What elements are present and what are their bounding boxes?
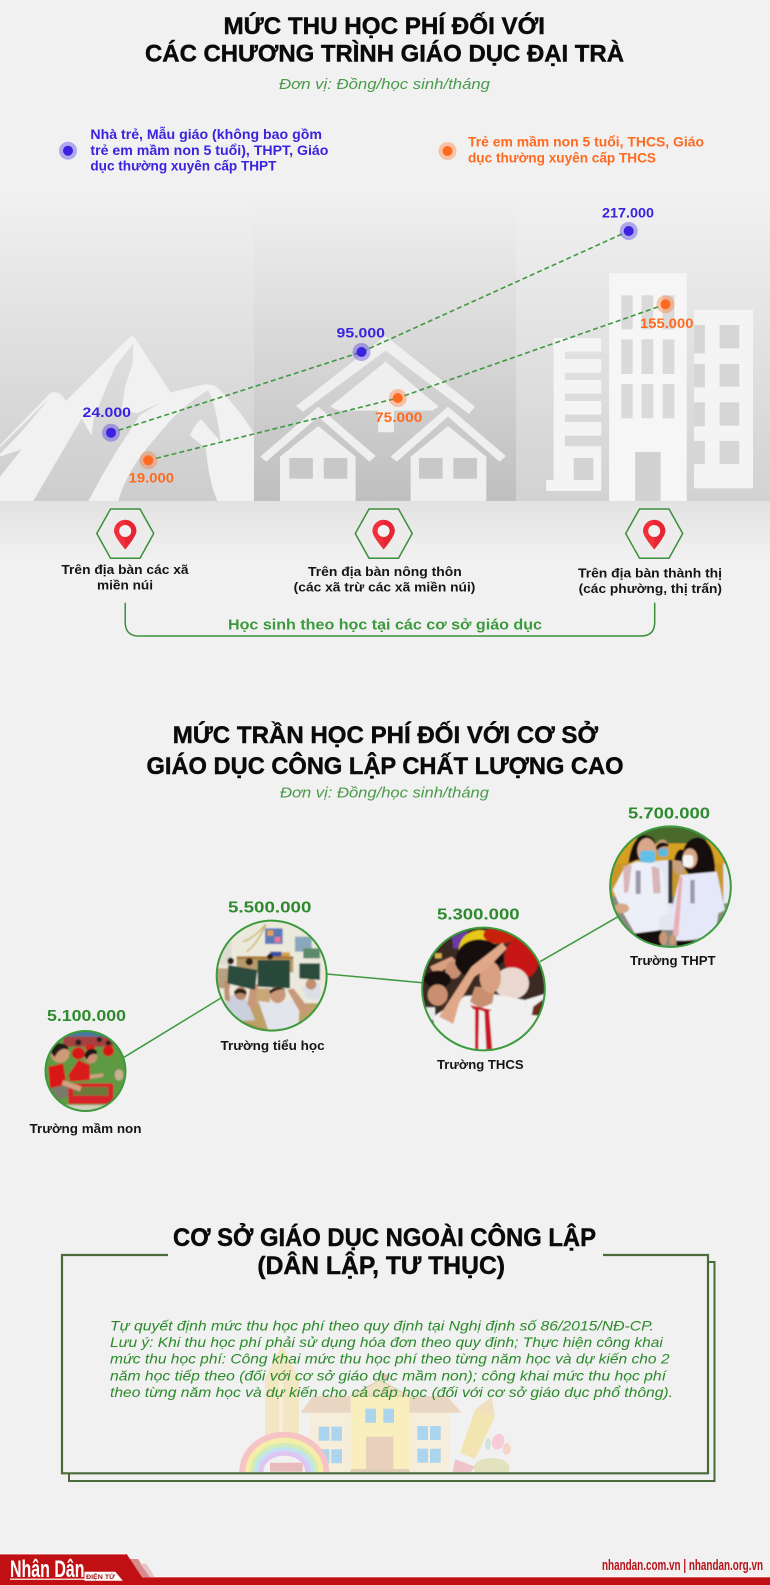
logo: Nhân Dân bbox=[0, 1553, 155, 1585]
line: orange series bbox=[148, 304, 666, 460]
value labels: 75.000 bbox=[375, 409, 423, 425]
location: mountain communes bbox=[61, 509, 189, 592]
school: upper secondary: Trường THPT bbox=[630, 953, 716, 968]
school: lower secondary bbox=[421, 908, 546, 1072]
heading bbox=[173, 1222, 596, 1280]
illustration: mountains bbox=[0, 336, 254, 501]
location: rural bbox=[294, 509, 475, 594]
value labels: 24.000 bbox=[82, 404, 131, 420]
school: primary: 5.500.000 bbox=[228, 899, 312, 916]
value labels: 19.000 bbox=[129, 470, 174, 486]
panel: grey gradient columns bbox=[0, 190, 770, 561]
title: section 1 bbox=[145, 12, 624, 68]
value labels: 155.000 bbox=[640, 315, 694, 331]
location: mountain communes: miền núi bbox=[97, 577, 153, 592]
data points: blue bbox=[102, 222, 638, 442]
legend: orange series: dục thường xuyên cấp THCS bbox=[468, 150, 656, 165]
photo: primary pupils with slates bbox=[216, 920, 328, 1032]
value labels: 217.000 bbox=[602, 205, 654, 221]
legend: orange series bbox=[438, 135, 704, 165]
heading: CƠ SỞ GIÁO DỤC NGOÀI CÔNG LẬP bbox=[173, 1222, 596, 1252]
body text: Lưu ý: Khi thu học phí phải sử dụng hóa đơn theo quy định; Thực hiện công khai bbox=[110, 1334, 664, 1350]
frame bbox=[62, 1255, 708, 1473]
school: preschool: Trường mầm non bbox=[30, 1121, 142, 1136]
frame shadow bbox=[69, 1262, 714, 1481]
location: urban bbox=[578, 509, 722, 596]
illustration: buildings bbox=[546, 273, 753, 501]
location: rural: (các xã trừ các xã miền núi) bbox=[294, 580, 475, 594]
school: primary bbox=[210, 899, 330, 1053]
unit subtitle: section 2: Đơn vị: Đồng/học sinh/tháng bbox=[280, 784, 490, 802]
location: urban: Trên địa bàn thành thị bbox=[578, 566, 722, 581]
body text: mức thu học phí: Công khai mức thu học phí theo từng năm học và dự kiến cho 2 bbox=[110, 1351, 670, 1367]
location: mountain communes: Trên địa bàn các xã bbox=[61, 562, 189, 577]
body text: năm học tiếp theo (đối với cơ sở giáo dục mầm non); công khai mức thu học phí bbox=[110, 1367, 668, 1383]
location: rural: Trên địa bàn nông thôn bbox=[308, 564, 462, 579]
title: section 2 bbox=[146, 720, 624, 780]
line: blue series bbox=[111, 231, 629, 433]
legend: blue series bbox=[59, 127, 328, 174]
panel: non-public institutions bbox=[60, 1223, 716, 1482]
title: section 2: MỨC TRẦN HỌC PHÍ ĐỐI VỚI CƠ SỞ bbox=[173, 720, 599, 749]
illustration: houses bbox=[260, 336, 506, 501]
school: upper secondary bbox=[609, 808, 732, 968]
photo: preschool children bbox=[44, 1030, 126, 1112]
body text: Tự quyết định mức thu học phí theo quy định tại Nghị định số 86/2015/NĐ-CP. bbox=[110, 1318, 654, 1334]
logo: Nhân Dân: Nhân Dân bbox=[10, 1556, 84, 1583]
heading: (DÂN LẬP, TƯ THỤC) bbox=[257, 1250, 505, 1280]
school: lower secondary: Trường THCS bbox=[437, 1057, 524, 1072]
body text: theo từng năm học và dự kiến cho cả cấp học (đối với cơ sở giáo dục phổ thông). bbox=[110, 1384, 673, 1400]
title: section 2: GIÁO DỤC CÔNG LẬP CHẤT LƯỢNG CAO bbox=[146, 752, 624, 780]
photo: student saluting bbox=[421, 926, 546, 1052]
legend: orange series: Trẻ em mầm non 5 tuổi, THCS, Giáo bbox=[468, 135, 704, 150]
legend: blue series: trẻ em mầm non 5 tuổi), THPT, Giáo bbox=[90, 143, 328, 158]
bracket with caption: Học sinh theo học tại các cơ sở giáo dục bbox=[228, 616, 542, 633]
photo: high school students bbox=[609, 825, 732, 948]
location: urban: (các phường, thị trấn) bbox=[579, 581, 722, 596]
body text bbox=[110, 1318, 673, 1400]
legend: blue series: dục thường xuyên cấp THPT bbox=[90, 158, 277, 174]
bracket with caption bbox=[125, 603, 655, 636]
school: upper secondary: 5.700.000 bbox=[628, 805, 710, 822]
logo: Nhân Dân: ĐIỆN TỬ bbox=[86, 1572, 116, 1581]
school: preschool bbox=[30, 1008, 142, 1136]
data points: orange bbox=[139, 295, 675, 469]
title: section 1: CÁC CHƯƠNG TRÌNH GIÁO DỤC ĐẠI TRÀ bbox=[145, 40, 624, 68]
school: preschool: 5.100.000 bbox=[47, 1008, 126, 1025]
footer bbox=[0, 1553, 770, 1585]
value labels: 95.000 bbox=[336, 324, 385, 340]
school: lower secondary: 5.300.000 bbox=[437, 906, 520, 923]
connector lines between schools bbox=[123, 917, 618, 1058]
unit subtitle: section 1: Đơn vị: Đồng/học sinh/tháng bbox=[279, 76, 491, 93]
school: primary: Trường tiểu học bbox=[220, 1038, 325, 1053]
title: section 1: MỨC THU HỌC PHÍ ĐỐI VỚI bbox=[224, 12, 545, 40]
value labels bbox=[82, 205, 694, 486]
illustration: faded school with rainbow and pencils bbox=[239, 1345, 511, 1472]
line chart: fee by area bbox=[82, 205, 694, 486]
legend: blue series: Nhà trẻ, Mẫu giáo (không bao gồm bbox=[90, 127, 322, 142]
